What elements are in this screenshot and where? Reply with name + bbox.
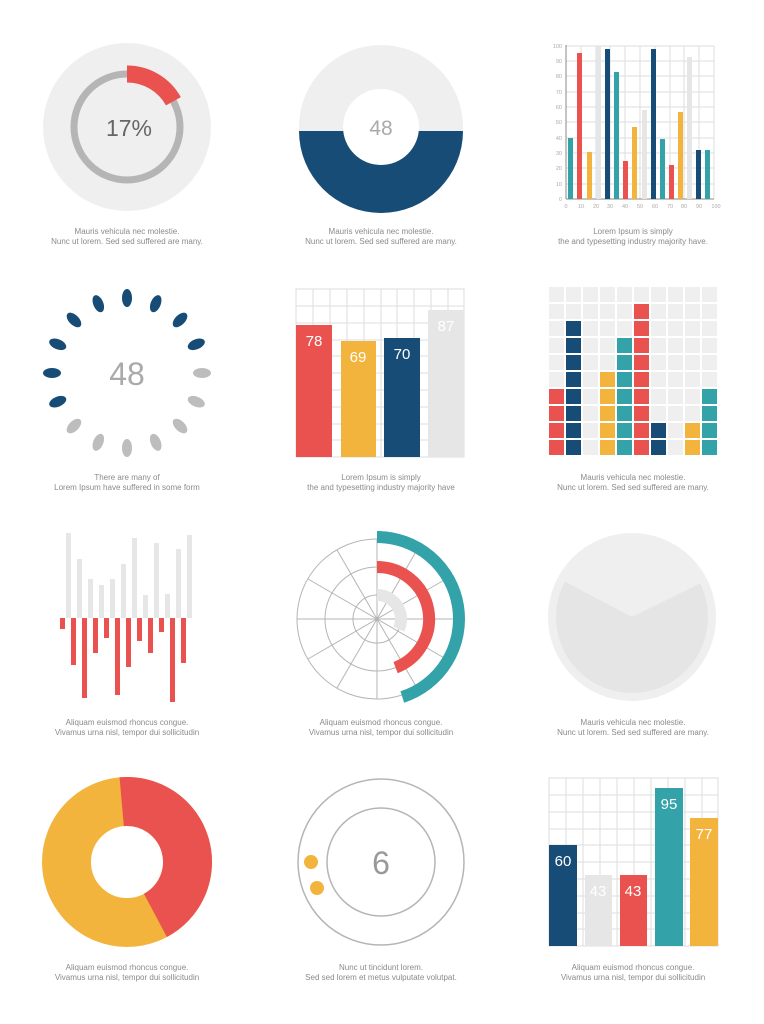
chart: column bar chart: 90 xyxy=(556,59,562,65)
caption 1: Nunc ut lorem. Sed sed suffered are many. xyxy=(51,237,203,246)
chart: column bar chart: 10 xyxy=(556,182,562,188)
caption 9 xyxy=(557,718,709,737)
caption 6: Mauris vehicula nec molestie. xyxy=(581,473,685,482)
caption 7: Aliquam euismod rhoncus congue. xyxy=(66,718,188,727)
chart: column bar chart: 20 xyxy=(593,204,599,210)
chart: column bar chart: 20 xyxy=(556,166,562,172)
chart: grey pie xyxy=(548,533,716,701)
caption 1: Mauris vehicula nec molestie. xyxy=(75,227,179,236)
caption 12: Vivamus urna nisl, tempor dui sollicitudin xyxy=(561,973,705,982)
caption 11: Nunc ut tincidunt lorem. xyxy=(339,963,423,972)
caption 11: Sed sed lorem et metus vulputate volutpat. xyxy=(305,973,457,982)
chart: ring 6 xyxy=(298,779,464,945)
chart: 17% ring: 17% xyxy=(106,115,152,141)
caption 8 xyxy=(309,718,453,737)
caption 10: Aliquam euismod rhoncus congue. xyxy=(66,963,188,972)
caption 10 xyxy=(55,963,199,982)
chart: column bar chart: 30 xyxy=(556,151,562,157)
chart: column bar chart: 70 xyxy=(556,90,562,96)
caption 7: Vivamus urna nisl, tempor dui sollicitudin xyxy=(55,728,199,737)
chart: dot ring 48: 48 xyxy=(109,356,145,392)
caption 4 xyxy=(54,473,200,492)
caption 6 xyxy=(557,473,709,492)
chart: grid bar chart 78 69 70 87: 78 xyxy=(306,333,322,350)
caption 11 xyxy=(305,963,457,982)
caption 4: Lorem Ipsum have suffered in some form xyxy=(54,483,200,492)
caption 3: Lorem Ipsum is simply xyxy=(593,227,673,236)
chart: column bar chart: 60 xyxy=(652,204,658,210)
caption 9: Nunc ut lorem. Sed sed suffered are many. xyxy=(557,728,709,737)
chart: 17% ring xyxy=(43,43,211,211)
chart: column bar chart: 30 xyxy=(607,204,613,210)
caption 9: Mauris vehicula nec molestie. xyxy=(581,718,685,727)
chart: column bar chart xyxy=(553,44,721,210)
chart: ring 6: 6 xyxy=(372,845,390,881)
chart: column bar chart: 90 xyxy=(696,204,702,210)
chart: column bar chart: 40 xyxy=(622,204,628,210)
chart: column bar chart: 80 xyxy=(556,74,562,80)
chart: column bar chart: 0 xyxy=(559,197,562,203)
chart: half donut 48: 48 xyxy=(369,117,393,140)
chart: grid bar chart 60 43 43 95 77: 77 xyxy=(696,826,712,843)
chart: column bar chart: 0 xyxy=(564,204,568,210)
chart: column bar chart: 80 xyxy=(681,204,687,210)
caption 2: Mauris vehicula nec molestie. xyxy=(329,227,433,236)
chart: column bar chart: 100 xyxy=(711,204,721,210)
caption 8: Aliquam euismod rhoncus congue. xyxy=(320,718,442,727)
caption 3: the and typesetting industry majority have. xyxy=(558,237,708,246)
chart: dot ring 48 xyxy=(43,289,211,457)
chart: column bar chart: 100 xyxy=(553,44,562,50)
caption 5: the and typesetting industry majority have xyxy=(307,483,455,492)
chart: grid bar chart 60 43 43 95 77: 43 xyxy=(625,883,641,900)
chart: grid bar chart 78 69 70 87: 70 xyxy=(394,346,410,363)
chart: column bar chart: 10 xyxy=(578,204,584,210)
chart: column bar chart: 50 xyxy=(637,204,643,210)
chart: column bar chart: 60 xyxy=(556,105,562,111)
caption 3 xyxy=(558,227,708,246)
chart: grid bar chart 60 43 43 95 77: 60 xyxy=(555,853,571,870)
chart: grid bar chart 60 43 43 95 77: 43 xyxy=(590,883,606,900)
caption 2: Nunc ut lorem. Sed sed suffered are many. xyxy=(305,237,457,246)
chart: column bar chart: 40 xyxy=(556,136,562,142)
caption 1 xyxy=(51,227,203,246)
caption 10: Vivamus urna nisl, tempor dui sollicitudin xyxy=(55,973,199,982)
chart: grid bar chart 78 69 70 87 xyxy=(296,289,464,457)
caption 8: Vivamus urna nisl, tempor dui sollicitudin xyxy=(309,728,453,737)
chart: grid bar chart 78 69 70 87: 87 xyxy=(438,318,454,335)
caption 5: Lorem Ipsum is simply xyxy=(341,473,421,482)
chart: column bar chart: 70 xyxy=(667,204,673,210)
caption 4: There are many of xyxy=(94,473,160,482)
caption 12: Aliquam euismod rhoncus congue. xyxy=(572,963,694,972)
caption 7 xyxy=(55,718,199,737)
caption 2 xyxy=(305,227,457,246)
chart: polar radial bars xyxy=(297,537,459,699)
chart: up/down spike bars xyxy=(60,533,192,702)
chart: block grid xyxy=(549,287,717,455)
caption 5 xyxy=(307,473,455,492)
chart: grid bar chart 60 43 43 95 77: 95 xyxy=(661,796,677,813)
caption 12 xyxy=(561,963,705,982)
chart: grid bar chart 78 69 70 87: 69 xyxy=(350,349,366,366)
chart: grid bar chart 60 43 43 95 77 xyxy=(549,778,718,946)
chart: donut red yellow xyxy=(66,801,188,922)
chart: column bar chart: 50 xyxy=(556,120,562,126)
caption 6: Nunc ut lorem. Sed sed suffered are many. xyxy=(557,483,709,492)
chart: half donut 48 xyxy=(299,45,463,213)
